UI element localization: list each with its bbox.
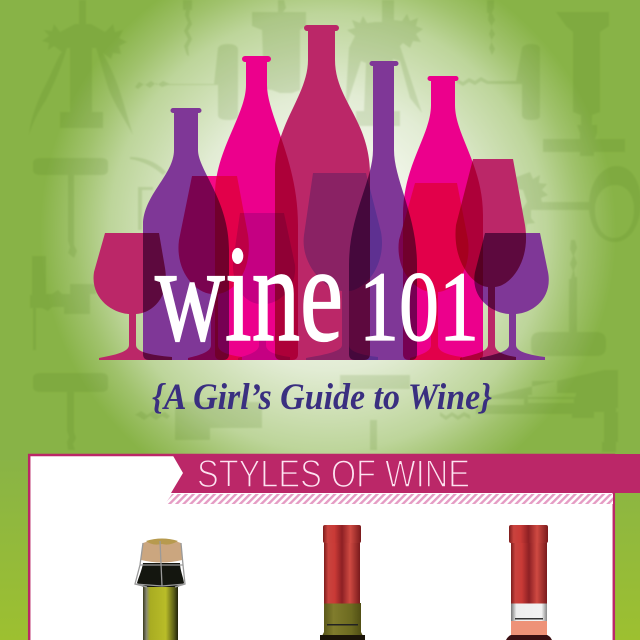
bottle: red wine [320, 525, 365, 640]
bottle: champagne [135, 538, 185, 640]
glass: crimson tall right [456, 159, 526, 360]
white radial glow [0, 0, 640, 460]
banner [171, 454, 640, 493]
bottle: magenta left [215, 56, 298, 360]
bottle: crimson centre [275, 25, 370, 360]
subtitle: {A Girl’s Guide to Wine} [152, 377, 492, 418]
glass: blue-tint centre [304, 173, 382, 360]
glass: crimson left [94, 233, 172, 360]
bottle: purple slim [349, 61, 417, 360]
bottle: purple left [143, 108, 229, 360]
title: wine 101: wine [155, 217, 343, 370]
panel: styles of wine [29, 453, 640, 640]
title: wine 101: 101 [359, 251, 479, 362]
glass: purple right [474, 233, 549, 360]
wine bottles and glasses [94, 25, 549, 360]
heading: STYLES OF WINE [197, 453, 470, 496]
glass: lavender centre [233, 213, 295, 360]
bottle: rose [506, 525, 552, 640]
panel border [29, 455, 614, 640]
hatched banner shadow [165, 494, 613, 504]
glass: red right [399, 183, 469, 360]
bottle: magenta right [403, 76, 483, 360]
glass: red tall left [178, 176, 249, 360]
corkscrew silhouette pattern [29, 0, 640, 452]
